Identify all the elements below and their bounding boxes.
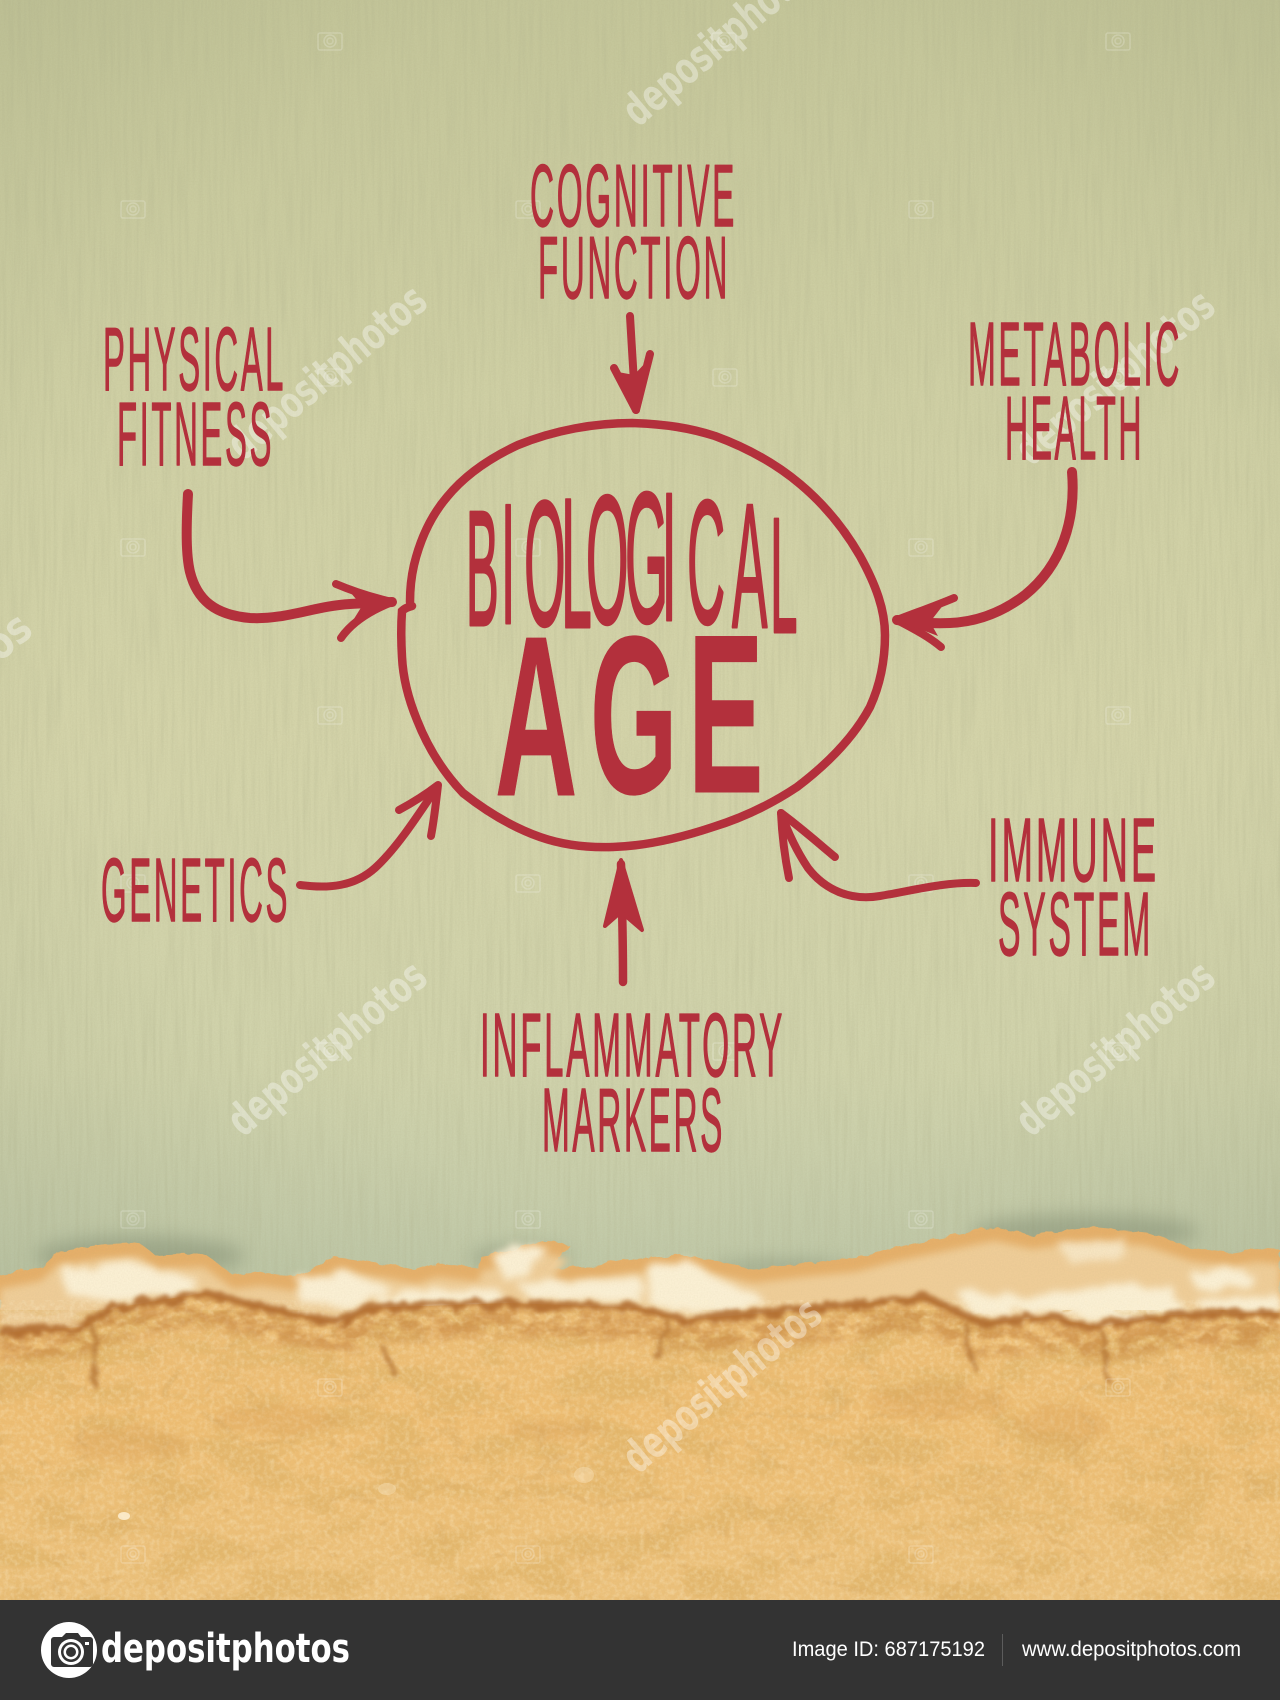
heading: biological: L: [561, 459, 592, 666]
diagram: biological age mind map: [101, 146, 1182, 1171]
arrow: metabolic health to centre: [896, 472, 1073, 647]
label: inflammatory markers: [480, 996, 785, 1171]
diagram: biological age mind map: COGNITIVE: [530, 146, 737, 245]
soft brown stain patches: [70, 1384, 1106, 1463]
main tan sheet: [0, 1293, 1280, 1600]
brown burnt edge line: [0, 1293, 1280, 1333]
sage green textured paper background: [0, 0, 1280, 1340]
watermarks over green paper: depositphotos: [217, 951, 437, 1146]
diagram: biological age mind map: FITNESS: [117, 385, 274, 485]
heading: age: E: [688, 587, 763, 840]
torn tan paper with deckled edge: [0, 1214, 1280, 1600]
watermarks over green paper: [0, 0, 1225, 1146]
label: cognitive function: [530, 146, 737, 317]
small camera watermark marks: [121, 33, 1130, 1228]
mottled stains and paper grain: [0, 1300, 1280, 1600]
diagram: biological age mind map: INFLAMMATORY: [480, 996, 785, 1096]
drip streaks: [92, 1320, 1108, 1390]
camera marks on tan paper: [121, 1379, 1130, 1563]
footer logo icon: camera badge: [41, 1622, 97, 1678]
heading: biological: C: [687, 463, 725, 661]
heading: biological: L: [770, 483, 797, 667]
label: immune system: [988, 801, 1159, 975]
heading: biological: I: [662, 455, 677, 659]
heading: biological: O: [524, 464, 566, 663]
heading: biological: B: [466, 476, 499, 660]
shadow patches above torn edge: [35, 1214, 1200, 1276]
footer image id: Image ID: 687175192: [792, 1638, 985, 1661]
heading: biological: O: [586, 458, 629, 662]
arrow: inflammatory markers to centre: [605, 860, 642, 982]
heading: biological: A: [732, 467, 767, 665]
heading: biological: G: [625, 455, 668, 663]
footer logo wordmark: depositphotos: [101, 1626, 350, 1672]
arrow: physical fitness to centre: [187, 494, 394, 638]
diagram: biological age mind map: GENETICS: [101, 841, 290, 941]
watermarks over green paper: depositphotos: [217, 275, 437, 470]
arrow: cognitive function to centre: [614, 316, 650, 412]
label: physical fitness: [103, 310, 286, 485]
arrow: immune system to centre: [781, 813, 976, 897]
heading: age: G: [590, 589, 678, 841]
deckle strip rim: [0, 1227, 1280, 1360]
footer bar: [0, 1600, 1280, 1700]
heading: age: A: [495, 590, 577, 844]
heading: biological: I: [501, 469, 515, 660]
footer divider: [1002, 1634, 1003, 1666]
diagram: biological age mind map: PHYSICAL: [103, 310, 286, 410]
label: metabolic health: [968, 305, 1182, 479]
pale highlights on deckle: [61, 1240, 1280, 1322]
diagram: biological age mind map: MARKERS: [542, 1071, 725, 1171]
central circle outline: [401, 423, 885, 847]
footer website: www.depositphotos.com: [1021, 1638, 1241, 1661]
arrow: genetics to centre: [300, 785, 438, 887]
white specks in tan paper: [118, 1467, 594, 1520]
diagram: biological age mind map: FUNCTION: [538, 218, 730, 317]
orange band below brown edge: [0, 1310, 1280, 1347]
deckle strip body: [0, 1241, 1280, 1360]
watermark on tan paper: depositphotos: [612, 1288, 832, 1483]
